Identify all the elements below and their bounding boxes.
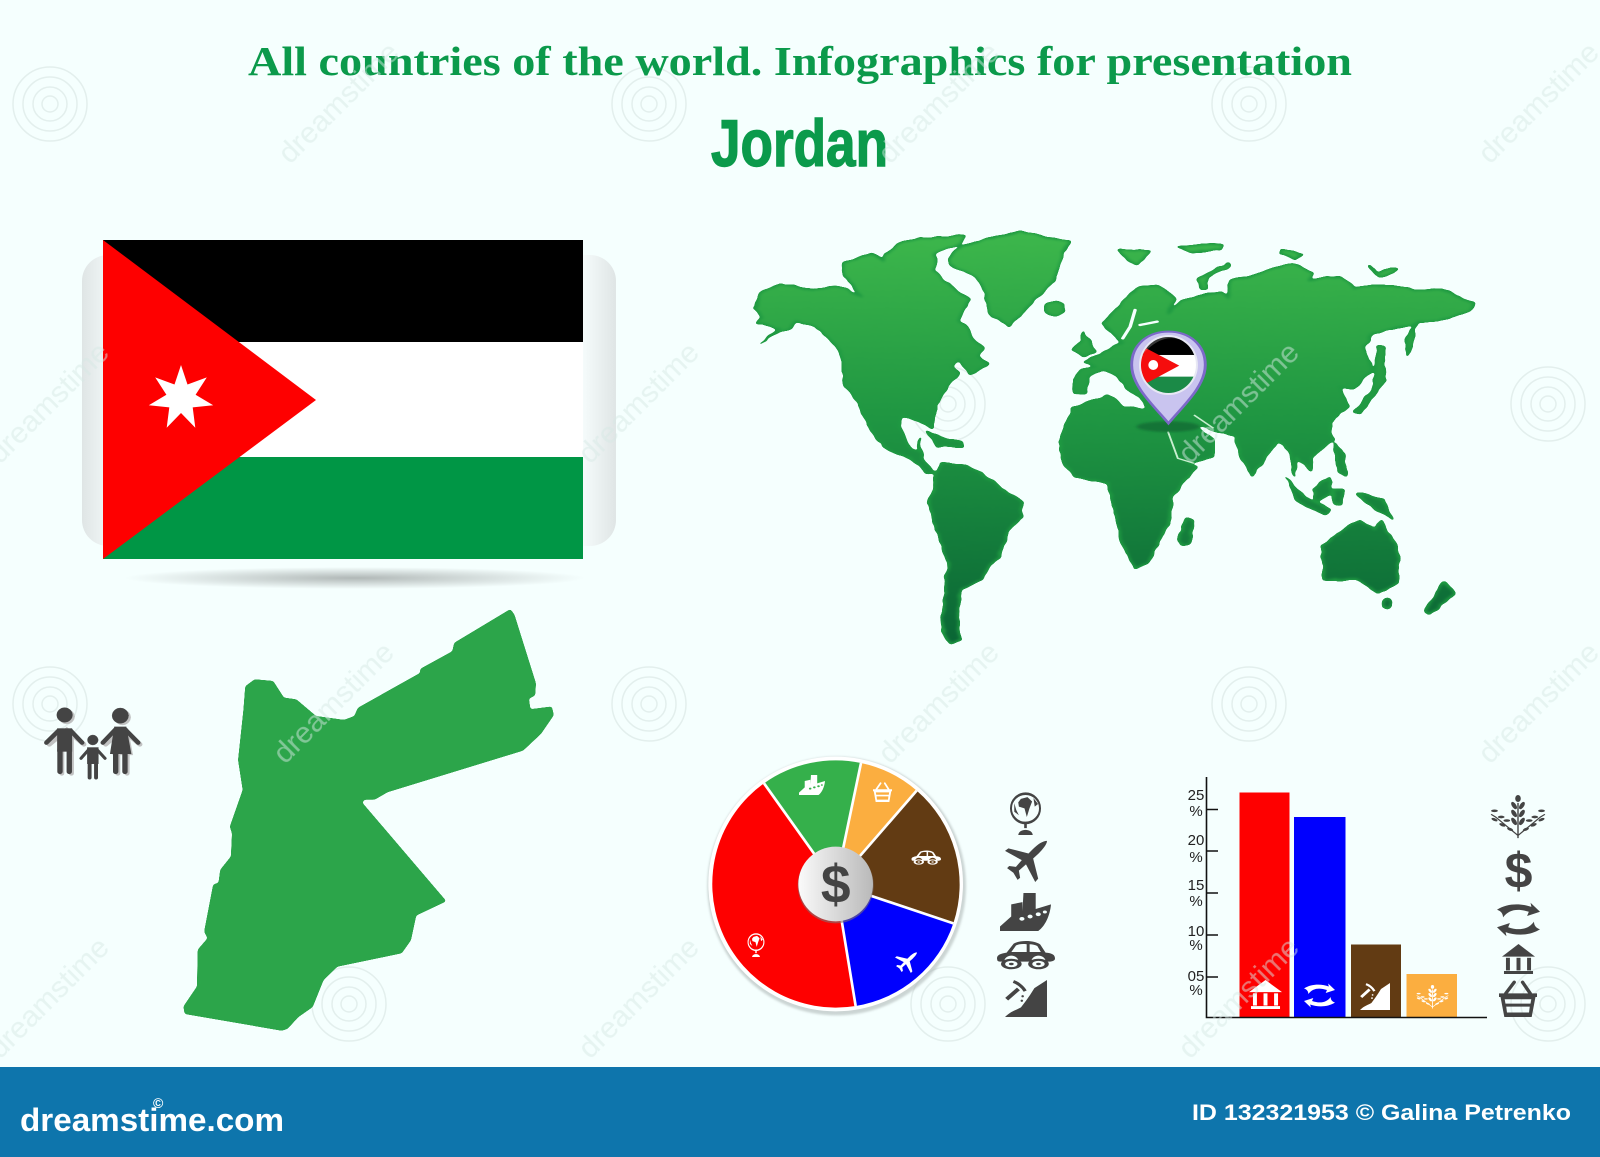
icon: dollar: $ — [1505, 843, 1533, 899]
pie legend icons — [997, 794, 1055, 1017]
watermark text: dreamstime — [1172, 336, 1306, 470]
axis labels: % — [1189, 803, 1203, 820]
figure: man — [46, 708, 82, 772]
islands: Caribbean — [925, 431, 963, 447]
bar: orange — [1406, 974, 1457, 1017]
axis labels: 10 — [1188, 923, 1204, 940]
bar: red — [1240, 792, 1290, 1017]
icon: exchange arrows in bar — [1304, 984, 1335, 1008]
icon: family of three — [46, 708, 140, 778]
figure: child — [81, 735, 105, 778]
center dollar disc — [798, 847, 874, 923]
icon: ship in segment — [799, 775, 825, 795]
flag: seven-point star — [149, 365, 213, 428]
watermark text: dreamstime — [272, 36, 406, 170]
footer: image credit: ID 132321953 © Galina Petrenko — [1192, 1100, 1571, 1125]
panel: national flag — [82, 240, 616, 589]
island: Severnaya Zemlya — [1280, 248, 1302, 258]
flag: black stripe — [103, 240, 583, 342]
axis labels: % — [1189, 937, 1203, 954]
watermark text: dreamstime — [872, 36, 1006, 170]
icon: bank — [1502, 944, 1535, 974]
axis labels: 15 — [1188, 877, 1204, 894]
chart axes and ticks — [1206, 777, 1487, 1018]
watermark text: dreamstime — [267, 636, 401, 770]
flag: red triangle — [103, 240, 316, 559]
island: Borneo — [1312, 477, 1331, 502]
map of Jordan — [184, 610, 553, 1030]
segment: red, globe — [712, 783, 856, 1008]
icon: basket — [1499, 982, 1537, 1017]
icon: plane in segment — [895, 952, 917, 973]
island: Greenland — [948, 232, 1069, 327]
location pin with Jordan flag — [1132, 332, 1205, 432]
icon: car — [997, 941, 1055, 968]
watermark text: dreamstime — [572, 931, 706, 1065]
axis labels: 20 — [1188, 832, 1204, 849]
icon: car in segment — [912, 851, 941, 864]
icon: globe in segment — [748, 934, 764, 957]
watermark text: dreamstime — [872, 636, 1006, 770]
island: Franz Josef Land — [1178, 244, 1223, 252]
icon: wheat — [1491, 795, 1545, 838]
segment: brown, car — [836, 791, 960, 923]
bar icons — [1249, 980, 1449, 1010]
islands: Japan and Sakhalin — [1354, 347, 1385, 413]
title: All countries of the world. Infographics for presentation — [248, 38, 1352, 84]
bar legend icons — [1491, 795, 1545, 1017]
bar chart — [1188, 777, 1487, 1018]
bar: blue — [1294, 817, 1346, 1017]
segment: orange, basket — [836, 763, 917, 884]
island: Novaya Zemlya — [1199, 263, 1231, 290]
bar: brown — [1351, 944, 1401, 1017]
island: Britain — [1073, 330, 1096, 357]
icon: exchange arrows — [1497, 903, 1540, 936]
figure: woman — [103, 708, 138, 772]
pie chart — [707, 757, 966, 1015]
flag: white stripe — [103, 342, 583, 457]
heading: country name: Jordan — [711, 106, 888, 180]
axis labels: 25 — [1188, 787, 1204, 804]
island: New Guinea — [1358, 493, 1393, 520]
axis labels — [1188, 787, 1204, 999]
island: New Siberian Islands — [1370, 265, 1398, 277]
flag: green stripe — [103, 457, 583, 559]
icon: wheat in bar — [1416, 985, 1449, 1009]
island: Madagascar — [1179, 518, 1194, 545]
icon: bank in bar — [1249, 980, 1282, 1009]
segment: blue, plane — [836, 884, 953, 1006]
islands: Philippines — [1334, 443, 1346, 477]
icon: ship — [1000, 893, 1051, 931]
axis labels: % — [1189, 893, 1203, 910]
footer: site name: dreamstime.com — [20, 1102, 284, 1138]
continent: Australia — [1322, 520, 1398, 593]
axis labels: % — [1189, 982, 1203, 999]
icon: globe — [1011, 794, 1040, 835]
center dollar disc: $ — [821, 855, 851, 914]
axis labels: % — [1189, 849, 1203, 866]
island: Sulawesi — [1333, 490, 1344, 505]
footer bar — [0, 1067, 1600, 1157]
continent: Eurasia — [1074, 263, 1474, 477]
island: Tasmania — [1382, 598, 1392, 609]
axis labels: 05 — [1188, 968, 1204, 985]
segment: green, ship — [764, 760, 861, 884]
pie segment icons — [748, 775, 941, 973]
watermark text: dreamstime — [1172, 931, 1306, 1065]
islands: New Zealand — [1425, 582, 1454, 615]
islands: Sumatra and Java — [1285, 477, 1331, 515]
world map — [755, 232, 1474, 643]
icon: basket in segment — [873, 783, 892, 802]
continent: Africa — [1059, 395, 1196, 568]
continent: North America — [755, 235, 988, 473]
icon: plane — [1005, 841, 1047, 882]
icon: mining hill — [1005, 980, 1047, 1017]
icon: mine in bar — [1360, 983, 1390, 1010]
watermark text: dreamstime — [572, 336, 706, 470]
island: Iceland — [1046, 301, 1064, 316]
continent: South America — [929, 463, 1022, 643]
footer: copyright mark above the site name: © — [153, 1095, 164, 1111]
island: Svalbard — [1118, 250, 1150, 265]
